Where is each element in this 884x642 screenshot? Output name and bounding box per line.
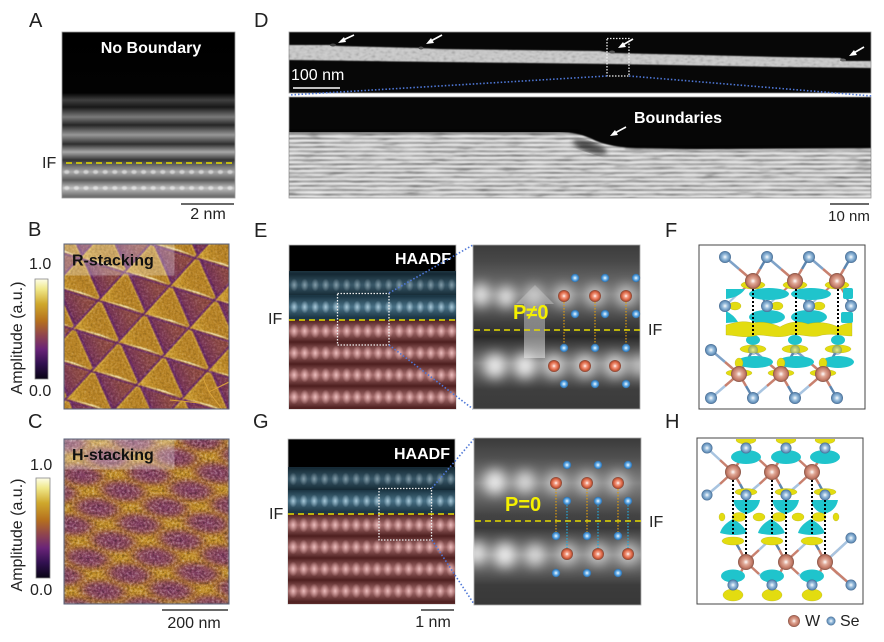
legend: W and Se atoms xyxy=(788,613,860,630)
cyan lobes xyxy=(720,450,840,582)
panel D top: wide view of the film xyxy=(289,32,871,93)
panel label G: G xyxy=(253,411,269,433)
atoms xyxy=(548,274,640,388)
scale bar A: 2 nm xyxy=(190,206,226,223)
colorbar C: Amplitude (a.u.) xyxy=(9,479,26,591)
film band xyxy=(289,45,871,68)
interface line E xyxy=(289,319,456,321)
panel E: false-colour HAADF image xyxy=(289,245,456,409)
zoom connector lines G xyxy=(432,439,474,604)
label: R-stacking: R-stacking xyxy=(72,252,154,270)
heading: No Boundary: No Boundary xyxy=(101,40,201,57)
dashed selection box xyxy=(338,294,389,345)
panel label F: F xyxy=(665,220,677,242)
colorbar B: 0.0 xyxy=(29,383,51,400)
polarization arrow xyxy=(516,285,554,358)
panel D bottom: magnified boundary xyxy=(289,97,871,198)
blurred atom columns xyxy=(468,470,638,567)
zoom connector lines D xyxy=(289,76,872,96)
atoms xyxy=(702,442,856,590)
IF label A: IF xyxy=(42,155,56,172)
atoms xyxy=(550,461,634,577)
colorbar B: 1.0 xyxy=(29,256,51,273)
interface line xyxy=(475,520,641,522)
panel label C: C xyxy=(28,411,42,433)
label: H-stacking: H-stacking xyxy=(72,447,154,464)
panel label D: D xyxy=(254,10,268,32)
panel E inset: polar interface model xyxy=(472,245,649,409)
label: P not equal 0: P≠0 xyxy=(513,302,548,324)
panel label E: E xyxy=(254,220,267,242)
IF label G inset: IF xyxy=(649,514,663,531)
colorbar B xyxy=(9,256,51,400)
interface line xyxy=(474,329,640,331)
panel H: charge density structure xyxy=(697,436,863,604)
yellow charge bands xyxy=(726,281,852,376)
blurred atom columns xyxy=(472,284,649,378)
panel label H: H xyxy=(665,411,679,433)
legend: W and Se atoms: W xyxy=(805,613,821,630)
W-Se vertical links xyxy=(556,489,628,548)
distortion streaks lower right xyxy=(170,378,229,409)
scale bar D: 10 nm xyxy=(828,208,870,225)
IF label G: IF xyxy=(269,506,283,523)
panel label B: B xyxy=(28,219,41,241)
interface line A xyxy=(66,162,234,164)
yellow lobes xyxy=(719,436,839,601)
scale bar xyxy=(293,87,340,89)
bonds xyxy=(728,260,766,302)
interface line G xyxy=(288,513,455,515)
dotted links xyxy=(753,289,838,336)
legend: W and Se atoms: Se xyxy=(840,613,860,630)
panel A: no boundary STEM image xyxy=(62,32,235,198)
arrows xyxy=(338,35,864,56)
colorbar B: Amplitude (a.u.) xyxy=(9,282,26,394)
arrow to boundary xyxy=(610,127,626,136)
IF label E inset: IF xyxy=(648,322,662,339)
dark step notch xyxy=(571,137,609,157)
label: H-stacking xyxy=(64,440,174,470)
panel G: false-colour HAADF image xyxy=(288,439,455,604)
panel F: charge density structure xyxy=(699,245,865,409)
heading: Boundaries: Boundaries xyxy=(634,110,722,127)
dashed selection box xyxy=(607,38,629,76)
zoom connector lines E xyxy=(389,245,473,409)
scale bar G: 1 nm xyxy=(415,614,451,631)
W-Se vertical links xyxy=(564,302,626,344)
panel B: R-stacking moire map xyxy=(64,244,229,409)
label: R-stacking xyxy=(64,244,174,276)
label: P equals 0: P=0 xyxy=(505,494,541,516)
cyan charge bands xyxy=(726,288,854,368)
colorbar C: 1.0 xyxy=(30,457,52,474)
scale bar A xyxy=(181,204,234,223)
colorbar C: 0.0 xyxy=(30,582,52,599)
scale bar C xyxy=(162,610,228,632)
dotted links xyxy=(733,480,825,554)
atoms xyxy=(705,251,857,404)
panel G inset: non-polar interface model xyxy=(468,438,641,605)
panel label A: A xyxy=(29,10,43,32)
scale label: 100 nm xyxy=(291,67,344,84)
panel C: H-stacking moire map xyxy=(64,439,229,604)
heading: HAADF: HAADF xyxy=(395,251,451,268)
layered film xyxy=(289,132,871,198)
bonds xyxy=(710,450,744,492)
scale bar C: 200 nm xyxy=(167,615,221,632)
dashed selection box xyxy=(379,488,432,540)
IF label E: IF xyxy=(268,311,282,328)
heading: HAADF: HAADF xyxy=(394,446,450,463)
colorbar C xyxy=(9,457,52,599)
